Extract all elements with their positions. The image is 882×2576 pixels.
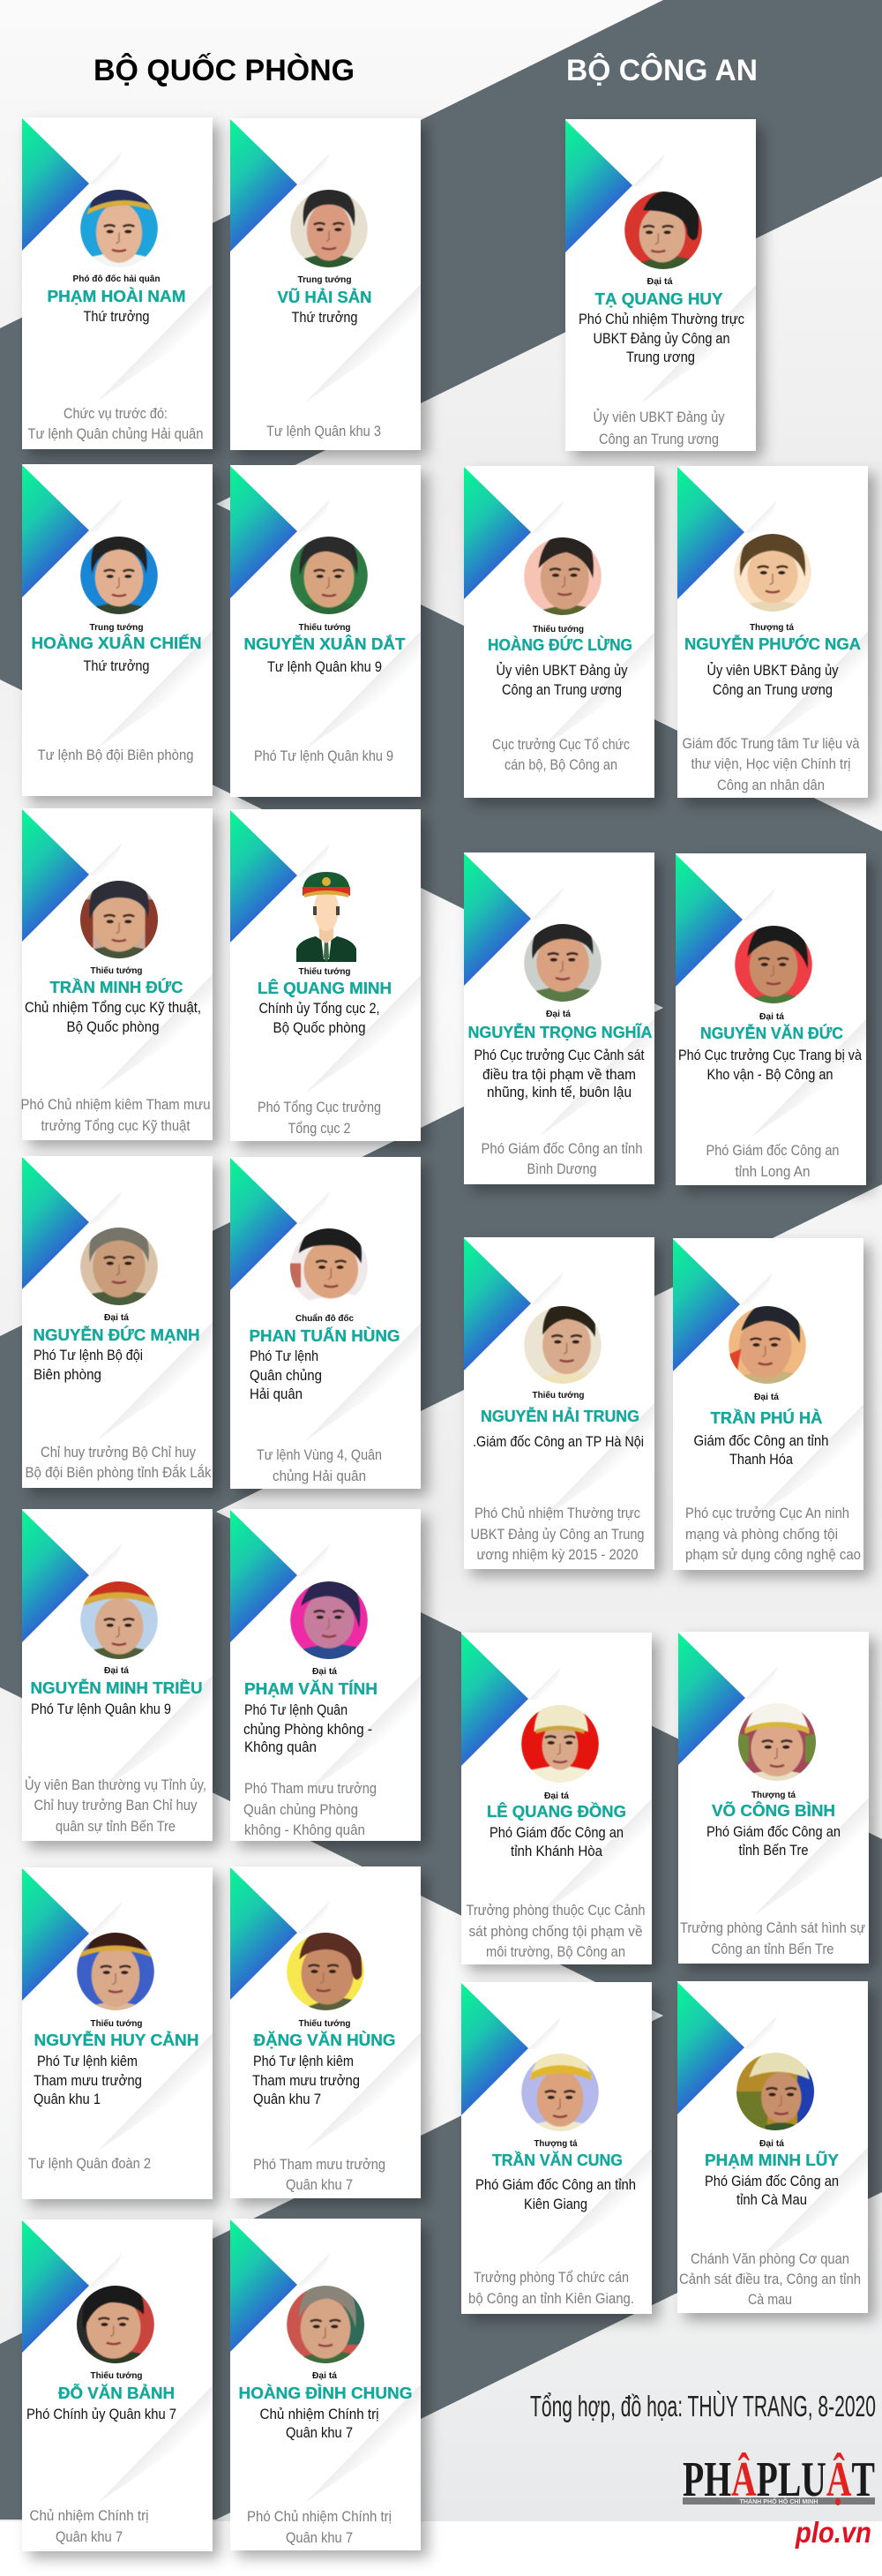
current role: điều tra tội phạm về tham bbox=[482, 1066, 636, 1083]
current role: Chính ủy Tổng cục 2, bbox=[259, 1000, 379, 1017]
card: Tạ Quang Huy bbox=[565, 119, 756, 451]
current role: Chủ nhiệm Chính trị bbox=[259, 2406, 379, 2422]
previous role bbox=[685, 1505, 861, 1563]
previous role: Công an tỉnh Bến Tre bbox=[711, 1941, 834, 1957]
previous role: Quân khu 7 bbox=[286, 2529, 353, 2546]
current role: Phó Tư lệnh Quân bbox=[244, 1701, 348, 1718]
name: NGUYỄN ĐỨC MẠNH bbox=[34, 1326, 199, 1344]
current role: Tham mưu trưởng bbox=[252, 2072, 360, 2089]
name: NGUYỄN PHƯỚC NGA bbox=[684, 635, 861, 653]
card: Nguyễn Xuân Dắt bbox=[230, 465, 421, 797]
current role: tỉnh Cà Mau bbox=[736, 2191, 807, 2208]
previous role: cán bộ, Bộ Công an bbox=[505, 756, 617, 773]
card: Nguyễn Văn Đức bbox=[676, 853, 866, 1185]
previous role bbox=[243, 1780, 377, 1838]
card: Phạm Minh Lũy bbox=[677, 1981, 868, 2313]
current role bbox=[259, 2406, 379, 2441]
previous role: UBKT Đảng ủy Công an Trung bbox=[471, 1526, 644, 1543]
previous role bbox=[257, 1446, 382, 1484]
previous role: trưởng Tổng cục Kỹ thuật bbox=[41, 1117, 191, 1134]
current role bbox=[490, 1824, 624, 1859]
previous role: Phó Giám đốc Công an bbox=[706, 1142, 840, 1159]
rank: Thiếu tướng bbox=[298, 966, 351, 977]
previous role: Tư lệnh Quân chủng Hải quân bbox=[28, 425, 203, 442]
portrait: Đặng Văn Hùng bbox=[287, 1933, 364, 2010]
previous role bbox=[706, 1142, 840, 1180]
card: Nguyễn Huy Cảnh bbox=[22, 1867, 213, 2199]
current role bbox=[693, 1432, 829, 1468]
rank: Đại tá bbox=[546, 1009, 571, 1019]
card: Phan Tuấn Hùng bbox=[230, 1157, 421, 1489]
rank: Đại tá bbox=[759, 2138, 784, 2149]
portrait: Vũ Hải Sản bbox=[290, 190, 368, 267]
current role: Công an Trung ương bbox=[502, 681, 622, 698]
current role: Ủy viên UBKT Đảng ủy bbox=[496, 662, 628, 679]
rank: Trung tướng bbox=[298, 274, 351, 285]
card: Lê Quang Đồng bbox=[461, 1633, 652, 1964]
previous role: Trưởng phòng thuộc Cục Cảnh bbox=[466, 1902, 646, 1919]
portrait: Phạm Văn Tính bbox=[290, 1581, 368, 1659]
previous role: Phó Giám đốc Công an tỉnh bbox=[482, 1140, 642, 1157]
current role: Tham mưu trưởng bbox=[34, 2072, 142, 2089]
portrait: Nguyễn Minh Triều bbox=[80, 1581, 158, 1659]
rank: Thiếu tướng bbox=[90, 2018, 143, 2029]
previous role: Chánh Văn phòng Cơ quan bbox=[691, 2250, 849, 2267]
portrait: Phan Tuấn Hùng bbox=[290, 1228, 368, 1301]
portrait: Nguyễn Đức Mạnh bbox=[80, 1228, 158, 1305]
previous role: Ủy viên Ban thường vụ Tỉnh ủy, bbox=[25, 1776, 206, 1793]
rank: Đại tá bbox=[104, 1312, 129, 1323]
current role: Hải quân bbox=[250, 1386, 303, 1402]
portrait: Trần Phú Hà bbox=[727, 1301, 811, 1389]
current role bbox=[579, 311, 744, 365]
previous role bbox=[25, 1776, 206, 1835]
current role bbox=[259, 1000, 379, 1036]
previous role: Chỉ huy trưởng Ban Chỉ huy bbox=[34, 1797, 198, 1814]
current role bbox=[705, 2173, 839, 2208]
current role: Phó Giám đốc Công an bbox=[490, 1824, 624, 1841]
previous role: Quân khu 7 bbox=[286, 2176, 353, 2193]
current role: Bộ Quốc phòng bbox=[67, 1018, 159, 1035]
previous role: Tư lệnh Quân khu 3 bbox=[266, 423, 381, 439]
portrait: Nguyễn Hải Trung bbox=[524, 1301, 603, 1389]
name: NGUYỄN TRỌNG NGHĨA bbox=[467, 1023, 653, 1041]
previous role: Cảnh sát điều tra, Công an tỉnh bbox=[679, 2271, 861, 2287]
previous role: Chủ nhiệm Chính trị bbox=[30, 2507, 148, 2524]
card: Trần Minh Đức bbox=[21, 808, 213, 1140]
portrait: Nguyễn Phước Nga bbox=[734, 534, 811, 612]
card: Trần Phú Hà bbox=[673, 1238, 863, 1570]
rank: Thượng tá bbox=[750, 622, 794, 633]
current role: Phó Tư lệnh Quân khu 9 bbox=[31, 1701, 171, 1717]
previous role: Phó Chủ nhiệm Thường trực bbox=[475, 1505, 640, 1521]
card: Hoàng Xuân Chiến bbox=[22, 464, 213, 796]
portrait: Nguyễn Văn Đức bbox=[735, 920, 812, 1009]
rank: Đại tá bbox=[647, 276, 673, 287]
portrait: Hoàng Xuân Chiến bbox=[80, 537, 158, 614]
current role: Quân khu 1 bbox=[34, 2091, 101, 2107]
portrait: Nguyễn Xuân Dắt bbox=[290, 537, 368, 614]
current role bbox=[34, 1347, 143, 1383]
current role bbox=[475, 2176, 636, 2212]
current role: Phó Cục trưởng Cục Cảnh sát bbox=[475, 1047, 645, 1063]
current role: Thứ trưởng bbox=[83, 657, 150, 674]
portrait: Nguyễn Huy Cảnh bbox=[77, 1933, 154, 2010]
current role: Ủy viên UBKT Đảng ủy bbox=[707, 662, 839, 679]
previous role: Trưởng phòng Tổ chức cán bbox=[474, 2269, 629, 2286]
previous role: Phó Tư lệnh Quân khu 9 bbox=[254, 747, 393, 764]
previous role: Phó Tổng Cục trưởng bbox=[258, 1099, 381, 1115]
card: Võ Công Bình bbox=[678, 1632, 869, 1964]
previous role: Quân khu 7 bbox=[56, 2528, 123, 2545]
previous role: thư viện, Học viện Chính trị bbox=[691, 755, 850, 772]
previous role: Phó Tham mưu trưởng bbox=[244, 1780, 377, 1797]
previous role: Cục trưởng Cục Tổ chức bbox=[492, 736, 630, 753]
current role: Phó Tư lệnh Bộ đội bbox=[34, 1347, 143, 1363]
current role: Quân khu 7 bbox=[253, 2091, 321, 2107]
previous role: quân sự tỉnh Bến Tre bbox=[56, 1818, 176, 1835]
current role: Phó Tư lệnh kiêm bbox=[37, 2053, 138, 2069]
previous role: tỉnh Long An bbox=[736, 1163, 810, 1180]
rank: Đại tá bbox=[104, 1665, 129, 1676]
name: TẠ QUANG HUY bbox=[594, 289, 723, 308]
previous role: Bộ đội Biên phòng tỉnh Đắk Lắk bbox=[25, 1464, 212, 1481]
previous role: môi trường, Bộ Công an bbox=[486, 1943, 625, 1960]
name: PHẠM VĂN TÍNH bbox=[244, 1679, 377, 1698]
name: TRẦN MINH ĐỨC bbox=[49, 978, 183, 996]
current role: Phó Tư lệnh bbox=[250, 1348, 318, 1364]
portrait: Nguyễn Trọng Nghĩa bbox=[524, 924, 602, 1002]
previous role: Tư lệnh Vùng 4, Quân bbox=[257, 1446, 382, 1463]
previous role: ương nhiệm kỳ 2015 - 2020 bbox=[476, 1546, 639, 1563]
name: HOÀNG ĐÌNH CHUNG bbox=[238, 2384, 413, 2402]
rank: Thượng tá bbox=[751, 1790, 796, 1800]
previous role bbox=[492, 736, 630, 773]
current role: Không quân bbox=[244, 1739, 317, 1755]
current role: Bộ Quốc phòng bbox=[273, 1019, 365, 1036]
current role: Phó Giám đốc Công an bbox=[705, 2173, 839, 2189]
previous role bbox=[25, 1444, 212, 1481]
previous role: Phó Chủ nhiệm Chính trị bbox=[247, 2508, 392, 2525]
current role: Công an Trung ương bbox=[713, 681, 833, 698]
card: Hoàng Đức Lừng bbox=[464, 466, 654, 798]
portrait: Phạm Minh Lũy bbox=[731, 2047, 819, 2136]
rank: Thượng tá bbox=[534, 2138, 578, 2149]
card: Nguyễn Đức Mạnh bbox=[22, 1156, 213, 1488]
previous role bbox=[593, 409, 725, 447]
rank: Đại tá bbox=[312, 2370, 337, 2381]
previous role: không - Không quân bbox=[244, 1821, 365, 1838]
current role: Chủ nhiệm Tổng cục Kỹ thuật, bbox=[25, 999, 201, 1016]
card: Phạm Hoài Nam bbox=[22, 117, 213, 449]
current role bbox=[34, 2053, 142, 2107]
portrait: Võ Công Bình bbox=[733, 1698, 821, 1786]
rank: Thiếu tướng bbox=[298, 622, 351, 633]
rank: Đại tá bbox=[754, 1392, 779, 1402]
name: PHAN TUẤN HÙNG bbox=[249, 1326, 400, 1345]
previous role: phạm sử dụng công nghệ cao bbox=[685, 1546, 861, 1563]
previous role bbox=[30, 2507, 148, 2545]
previous role: Tư lệnh Bộ đội Biên phòng bbox=[37, 747, 194, 763]
previous role: Công an nhân dân bbox=[717, 777, 825, 793]
portrait: Phạm Hoài Nam bbox=[80, 190, 158, 267]
previous role bbox=[253, 2156, 385, 2193]
rank: Thiếu tướng bbox=[298, 2018, 351, 2029]
current role: UBKT Đảng ủy Công an bbox=[593, 330, 730, 347]
name: NGUYỄN XUÂN DẮT bbox=[243, 635, 406, 653]
name: NGUYỄN MINH TRIỀU bbox=[30, 1679, 203, 1697]
previous role bbox=[680, 1919, 865, 1957]
previous role bbox=[468, 2269, 634, 2307]
current role: Quân chủng bbox=[250, 1367, 322, 1384]
current role: Kho vận - Bộ Công an bbox=[707, 1066, 833, 1083]
current role: Thanh Hóa bbox=[729, 1451, 793, 1468]
previous role: Ủy viên UBKT Đảng ủy bbox=[593, 409, 725, 425]
name: HOÀNG XUÂN CHIẾN bbox=[32, 634, 201, 652]
card: Đặng Văn Hùng bbox=[230, 1866, 421, 2198]
card: Nguyễn Phước Nga bbox=[677, 466, 868, 798]
rank: Thiếu tướng bbox=[533, 1390, 584, 1401]
rank: Trung tướng bbox=[90, 622, 143, 633]
current role: Kiên Giang bbox=[524, 2196, 587, 2212]
rank: Thiếu tướng bbox=[533, 624, 584, 635]
rank: Đại tá bbox=[312, 1666, 337, 1677]
previous role: Tổng cục 2 bbox=[288, 1120, 351, 1137]
logo: plo.vn: plo.vn bbox=[795, 2516, 871, 2549]
current role: Phó Chủ nhiệm Thường trực bbox=[579, 311, 744, 327]
portrait: Đỗ Văn Bảnh bbox=[77, 2286, 154, 2363]
previous role: Phó Tham mưu trưởng bbox=[253, 2156, 385, 2173]
portrait: Hoàng Đình Chung bbox=[287, 2286, 364, 2363]
previous role: sát phòng chống tội phạm về bbox=[469, 1923, 642, 1940]
current role: Phó Giám đốc Công an tỉnh bbox=[475, 2176, 636, 2193]
name: TRẦN VĂN CUNG bbox=[492, 2151, 623, 2169]
previous role: Chỉ huy trưởng Bộ Chỉ huy bbox=[41, 1444, 196, 1461]
current role bbox=[496, 662, 628, 698]
card: Trần Văn Cung bbox=[461, 1982, 652, 2314]
rank: Chuẩn đô đốc bbox=[295, 1313, 354, 1324]
rank: Thiếu tướng bbox=[90, 2370, 143, 2381]
card: Lê Quang Minh bbox=[230, 809, 421, 1141]
current role: tỉnh Bến Tre bbox=[739, 1842, 808, 1859]
portrait: Trần Minh Đức bbox=[80, 881, 158, 958]
previous role bbox=[28, 405, 203, 442]
name: LÊ QUANG MINH bbox=[258, 979, 392, 997]
portrait: Hoàng Đức Lừng bbox=[524, 537, 602, 615]
previous role: Phó Chủ nhiệm kiêm Tham mưu bbox=[21, 1096, 210, 1113]
previous role: chủng Hải quân bbox=[273, 1468, 366, 1484]
previous role: mạng và phòng chống tội bbox=[685, 1526, 838, 1543]
current role: Phó Giám đốc Công an bbox=[706, 1823, 841, 1840]
name: VÕ CÔNG BÌNH bbox=[712, 1801, 835, 1820]
previous role bbox=[471, 1505, 644, 1563]
card: Nguyễn Hải Trung bbox=[464, 1237, 654, 1569]
current role: Trung ương bbox=[626, 349, 695, 365]
previous role: Bình Dương bbox=[527, 1160, 596, 1177]
rank: Đại tá bbox=[544, 1791, 569, 1801]
card: Nguyễn Trọng Nghĩa bbox=[464, 852, 654, 1184]
previous role: Chức vụ trước đó: bbox=[64, 405, 168, 422]
rank: Đại tá bbox=[759, 1011, 784, 1022]
card: Đỗ Văn Bảnh bbox=[22, 2219, 213, 2551]
heading: Bộ Quốc phòng: BỘ QUỐC PHÒNG bbox=[93, 53, 355, 87]
rank: Thiếu tướng bbox=[90, 965, 143, 976]
current role: .Giám đốc Công an TP Hà Nội bbox=[473, 1433, 644, 1450]
rank: Phó đô đốc hải quân bbox=[72, 274, 161, 284]
current role: Thứ trưởng bbox=[291, 309, 358, 326]
name: NGUYỄN HẢI TRUNG bbox=[481, 1407, 639, 1425]
previous role bbox=[482, 1140, 642, 1177]
name: TRẦN PHÚ HÀ bbox=[711, 1408, 822, 1427]
current role: Quân khu 7 bbox=[286, 2424, 353, 2441]
name: HOÀNG ĐỨC LỪNG bbox=[488, 635, 632, 654]
current role bbox=[252, 2053, 360, 2107]
current role bbox=[707, 662, 839, 698]
current role: Tư lệnh Quân khu 9 bbox=[267, 658, 382, 675]
name: ĐỖ VĂN BẢNH bbox=[58, 2384, 175, 2402]
name: PHẠM MINH LŨY bbox=[705, 2151, 840, 2169]
current role bbox=[475, 1047, 645, 1100]
portrait: Trần Văn Cung bbox=[521, 2048, 599, 2137]
card: Phạm Văn Tính bbox=[230, 1509, 421, 1841]
current role bbox=[25, 999, 201, 1035]
previous role: Quân chủng Phòng bbox=[243, 1801, 358, 1818]
previous role bbox=[683, 735, 860, 793]
name: NGUYỄN HUY CẢNH bbox=[34, 2031, 199, 2049]
logo: Pháp Luật: PHÂPLUẬT bbox=[683, 2452, 875, 2507]
current role: Phó Tư lệnh kiêm bbox=[253, 2053, 354, 2069]
previous role bbox=[247, 2508, 392, 2546]
card: Hoàng Đình Chung bbox=[230, 2219, 421, 2550]
previous role bbox=[21, 1096, 210, 1134]
portrait: Tạ Quang Huy bbox=[624, 192, 702, 269]
current role: chủng Phòng không - bbox=[243, 1721, 372, 1738]
previous role: Tư lệnh Quân đoàn 2 bbox=[28, 2155, 151, 2172]
current role bbox=[243, 1701, 372, 1755]
current role: Thứ trưởng bbox=[83, 308, 150, 325]
icon: soldier avatar bbox=[296, 872, 356, 962]
previous role: Công an Trung ương bbox=[599, 431, 719, 447]
current role: tỉnh Khánh Hòa bbox=[511, 1843, 602, 1859]
heading: Bộ Công an: BỘ CÔNG AN bbox=[566, 53, 758, 87]
previous role bbox=[258, 1099, 381, 1137]
name: ĐẶNG VĂN HÙNG bbox=[254, 2031, 395, 2049]
previous role: Phó cục trưởng Cục An ninh bbox=[685, 1505, 849, 1521]
previous role bbox=[679, 2250, 861, 2308]
current role: Giám đốc Công an tỉnh bbox=[693, 1432, 829, 1449]
name: PHẠM HOÀI NAM bbox=[48, 287, 185, 305]
portrait: Lê Quang Đồng bbox=[519, 1700, 601, 1788]
current role bbox=[678, 1047, 862, 1083]
name: VŨ HẢI SẢN bbox=[277, 288, 372, 306]
name: LÊ QUANG ĐỒNG bbox=[487, 1802, 626, 1821]
previous role bbox=[466, 1902, 646, 1960]
card: Vũ Hải Sản bbox=[230, 118, 421, 450]
current role bbox=[706, 1823, 841, 1859]
previous role: bộ Công an tỉnh Kiên Giang. bbox=[468, 2290, 634, 2307]
previous role: Cà mau bbox=[748, 2291, 792, 2308]
current role: nhũng, kinh tế, buôn lậu bbox=[487, 1084, 632, 1100]
current role bbox=[250, 1348, 322, 1402]
logo: Pháp Luật: THÀNH PHỐ HỒ CHÍ MINH bbox=[739, 2497, 818, 2505]
current role: Biên phòng bbox=[34, 1366, 101, 1383]
current role: Phó Chính ủy Quân khu 7 bbox=[26, 2406, 176, 2422]
card: Nguyễn Minh Triều bbox=[22, 1509, 213, 1841]
name: NGUYỄN VĂN ĐỨC bbox=[700, 1024, 843, 1042]
